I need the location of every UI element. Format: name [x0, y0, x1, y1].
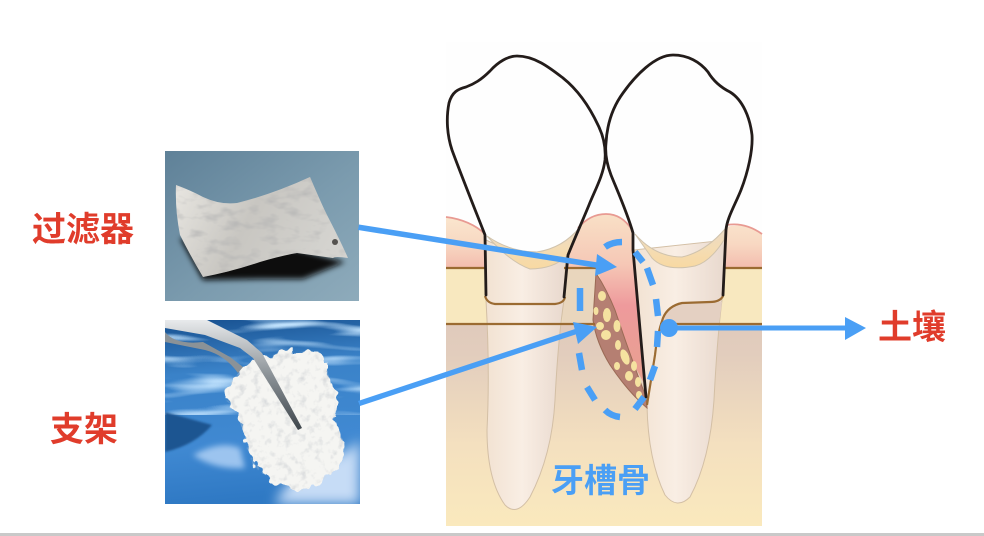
photo: filter membrane	[165, 151, 359, 301]
right tooth collar	[635, 229, 725, 268]
label: scaffold: 支架	[50, 411, 118, 449]
diagram background	[446, 42, 762, 526]
photo: scaffold held by tweezers	[165, 320, 360, 504]
left tooth collar	[487, 227, 580, 269]
interdental bone-loss area	[562, 268, 598, 324]
right root recession band	[661, 302, 722, 324]
left tooth root	[486, 240, 566, 510]
interdental gum and pocket	[566, 214, 645, 385]
bone fragment	[593, 273, 647, 408]
tooth outlines	[447, 55, 752, 397]
gum tissue right	[724, 226, 762, 268]
dental diagram	[446, 42, 762, 526]
label: alveolar bone: 牙槽骨	[551, 462, 650, 499]
label: filter: 过滤器	[32, 211, 134, 249]
arrow: soil to periodontal ligament	[660, 317, 866, 340]
right tooth root	[634, 240, 726, 503]
gum tissue left	[446, 217, 486, 268]
label: soil: 土壤	[878, 309, 946, 347]
gum margin lines	[446, 214, 762, 234]
arrow: scaffold to bone	[358, 322, 597, 406]
brown gum and bone lines	[446, 268, 762, 405]
bottom divider	[0, 533, 984, 536]
alveolar bone base	[446, 268, 762, 526]
arrow: filter to gum pocket	[358, 224, 617, 276]
dashed highlight ellipse	[579, 242, 658, 417]
